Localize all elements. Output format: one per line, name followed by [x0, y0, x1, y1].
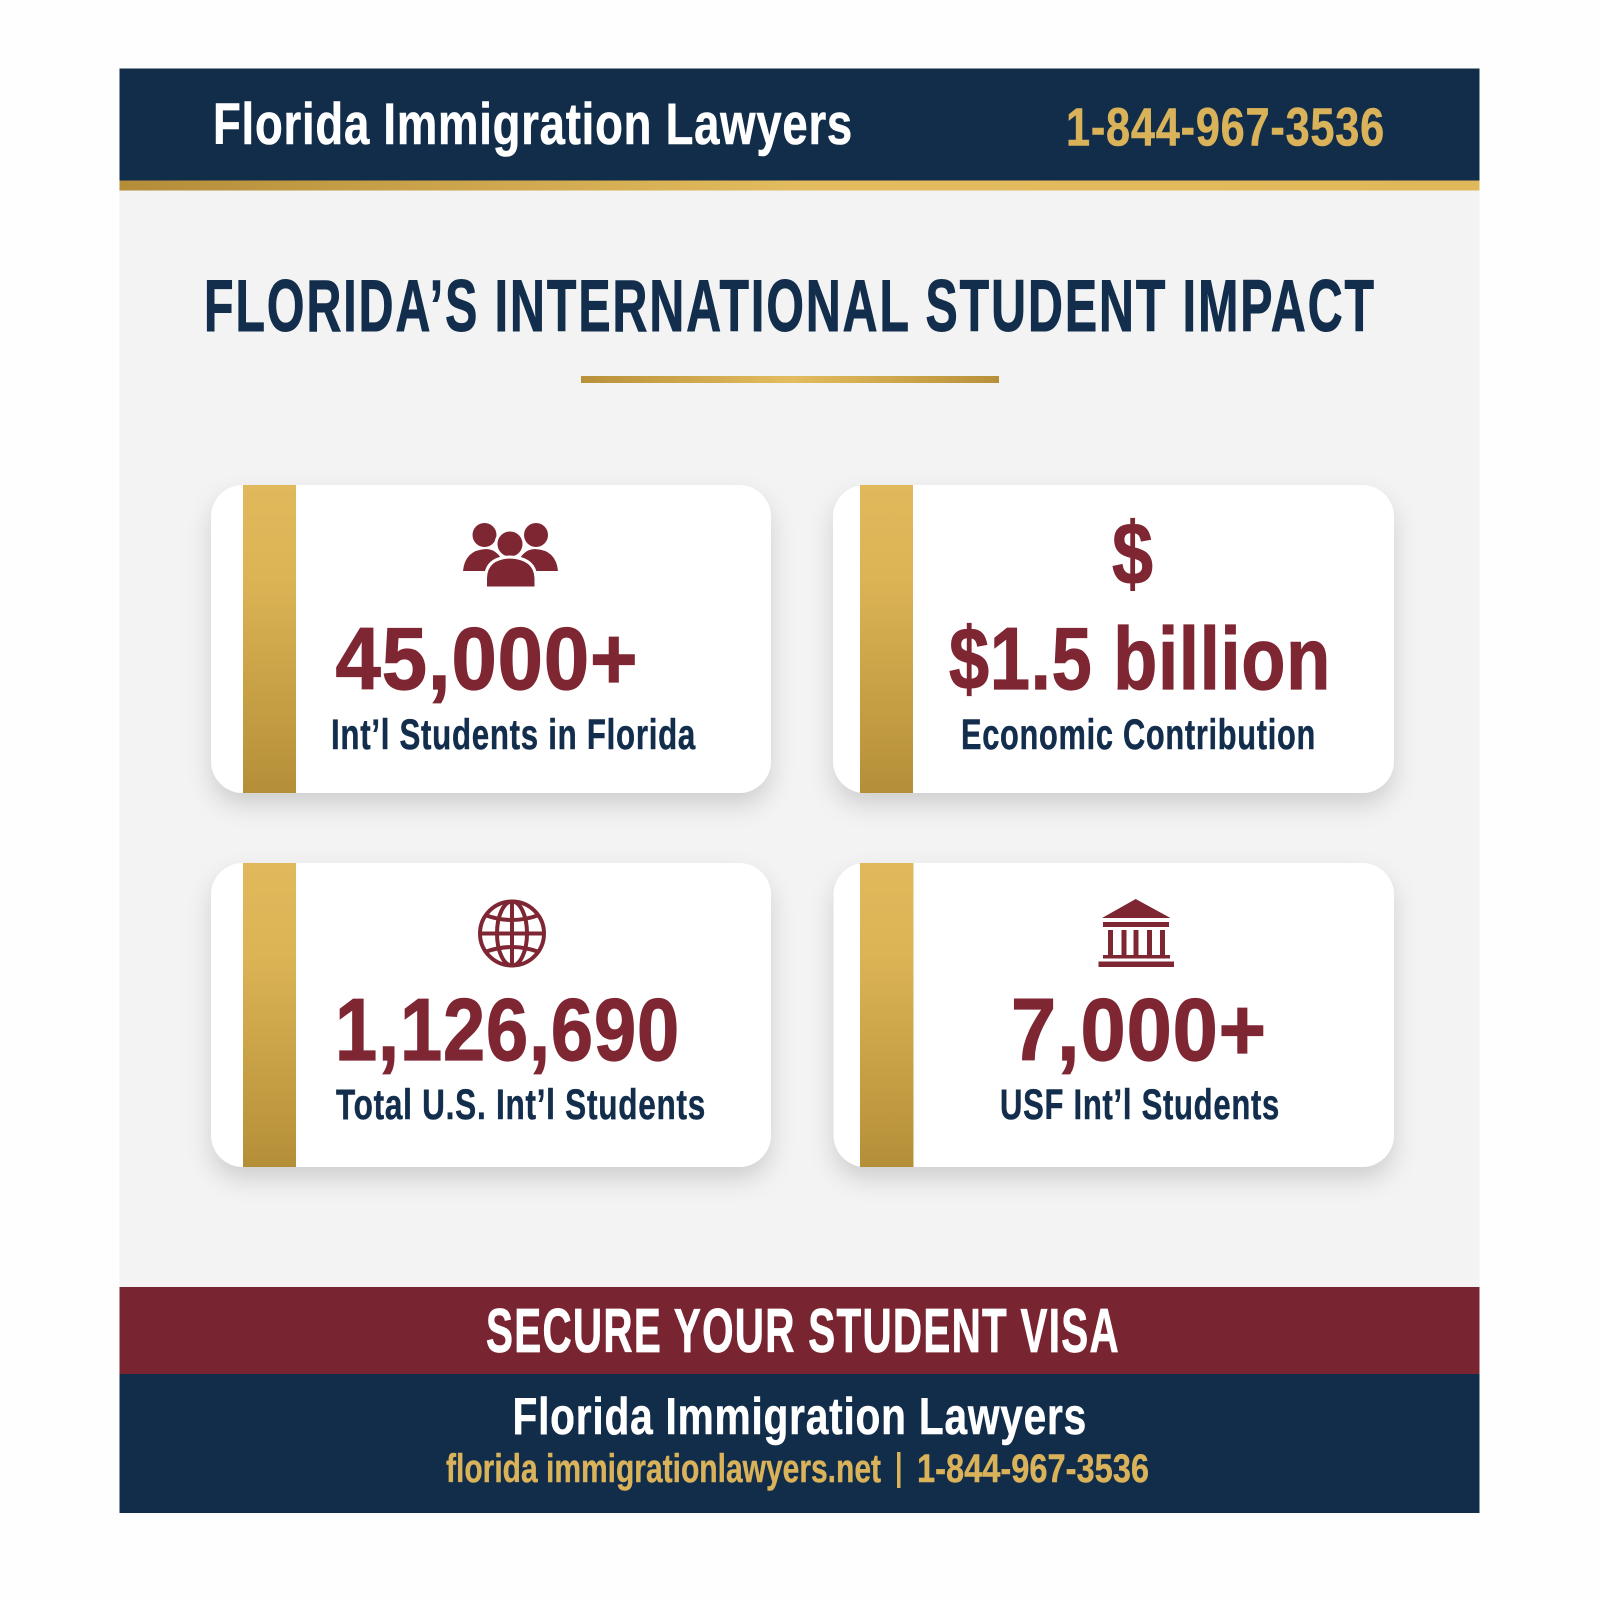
icon: university building — [1098, 899, 1174, 967]
panel: economic contribution — [833, 485, 1394, 793]
header gold rule — [120, 180, 1480, 190]
stat value: $1.5 billion — [949, 609, 1331, 708]
icon: globe — [480, 902, 544, 966]
gold accent bar — [860, 863, 914, 1167]
stat value: 7,000+ — [1011, 980, 1267, 1079]
call to action band — [120, 1287, 1480, 1374]
icon: group of people — [463, 523, 558, 588]
call to action text: SECURE YOUR STUDENT VISA — [486, 1297, 1120, 1366]
footer band — [120, 1374, 1480, 1513]
gold accent bar — [243, 863, 296, 1167]
title underline — [581, 376, 999, 383]
stat label: USF Int’l Students — [1000, 1081, 1280, 1129]
footer separator — [897, 1452, 900, 1488]
page background panel — [120, 190, 1480, 1287]
stat label: Economic Contribution — [961, 711, 1316, 759]
footer phone number: 1-844-967-3536 — [917, 1447, 1149, 1491]
footer firm name: Florida Immigration Lawyers — [512, 1388, 1087, 1446]
footer website: florida immigrationlawyers.net — [446, 1447, 881, 1491]
panel: international students in Florida — [211, 485, 771, 793]
header firm name: Florida Immigration Lawyers — [213, 92, 853, 157]
panel: total US international students — [211, 863, 771, 1167]
header band — [120, 68, 1480, 190]
gold accent bar — [860, 485, 913, 793]
stat value: 1,126,690 — [335, 980, 680, 1079]
stat label: Int’l Students in Florida — [331, 711, 696, 759]
stat value: 45,000+ — [336, 609, 638, 708]
icon: dollar sign: $ — [1112, 504, 1153, 603]
panel: USF international students — [834, 863, 1394, 1167]
stat label: Total U.S. Int’l Students — [336, 1081, 706, 1129]
header phone number: 1-844-967-3536 — [1066, 98, 1385, 158]
gold accent bar — [243, 485, 296, 793]
